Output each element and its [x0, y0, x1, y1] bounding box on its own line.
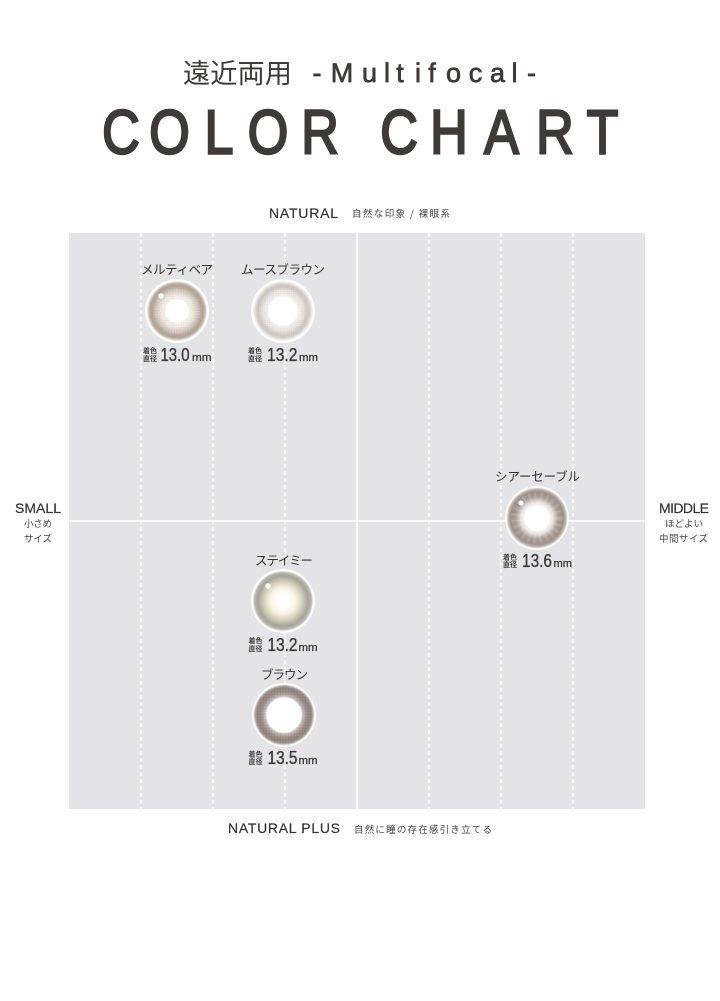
axis label: natural plus: 自然に瞳の存在感引き立てる [354, 822, 492, 836]
lens item: シアーセーブル: 直径 [503, 560, 517, 570]
lens item: ムースブラウン: 13.2 [267, 345, 298, 365]
lens item: シアーセーブル: mm [554, 558, 572, 570]
lens item: シアーセーブル: シアーセーブル [495, 466, 580, 485]
axis label: natural: NATURAL [269, 205, 338, 221]
axis label: natural plus [228, 820, 492, 836]
lens item: ステイミー: ステイミー [255, 550, 313, 569]
axis label: small: サイズ [24, 531, 52, 545]
lens item: メルティベア [141, 259, 213, 365]
lens item: ブラウン: 着色 [248, 750, 262, 760]
lens item: メルティベア: 着色 [143, 346, 157, 356]
axis label: small: SMALL [15, 500, 61, 516]
lens item: メルティベア: 13.0 [160, 345, 190, 365]
lens item: シアーセーブル: 13.6 [522, 551, 552, 571]
lens item: メルティベア: メルティベア [141, 259, 213, 278]
lens item: ブラウン: 13.5 [268, 748, 298, 768]
title: 遠近両用 Multifocal: -Multifocal- [312, 58, 536, 88]
axis label: small: 小さめ [24, 516, 52, 530]
lens item: ムースブラウン [241, 259, 325, 365]
axis label: natural [269, 205, 450, 221]
lens item: ブラウン: 直径 [248, 757, 262, 767]
lens item: ステイミー: 13.2 [268, 635, 298, 655]
axis label: middle: MIDDLE [659, 500, 709, 516]
lens item: シアーセーブル: 着色 [503, 552, 517, 562]
lens item: ムースブラウン: ムースブラウン [241, 259, 325, 278]
lens item: ブラウン: mm [298, 755, 318, 767]
axis label: middle: ほどよい [665, 516, 703, 530]
chart panel [69, 233, 645, 809]
axis label: natural plus: NATURAL PLUS [228, 820, 340, 836]
lens item: ステイミー: 着色 [248, 636, 262, 646]
lens item: メルティベア: mm [192, 352, 212, 364]
axis label: small [15, 500, 61, 545]
lens item: ブラウン: ブラウン [261, 664, 308, 683]
axis label: middle [659, 500, 709, 545]
lens item: ムースブラウン: mm [299, 352, 318, 364]
lens item: ムースブラウン: 着色 [248, 346, 262, 356]
title: 遠近両用 Multifocal: 遠近両用 [183, 52, 292, 91]
title: COLOR CHART: COLOR CHART [102, 98, 618, 167]
lens item: シアーセーブル [495, 466, 580, 571]
axis label: natural: 自然な印象 / 裸眼系 [352, 206, 450, 220]
lens item: ステイミー: mm [298, 642, 318, 654]
lens item: ブラウン [248, 664, 318, 768]
lens item: ムースブラウン: 直径 [248, 354, 262, 364]
axis label: middle: 中間サイズ [659, 531, 708, 545]
lens item: ステイミー: 直径 [248, 644, 262, 654]
lens item: メルティベア: 直径 [143, 354, 157, 364]
lens item: ステイミー [248, 550, 318, 655]
title: 遠近両用 Multifocal [183, 52, 536, 91]
